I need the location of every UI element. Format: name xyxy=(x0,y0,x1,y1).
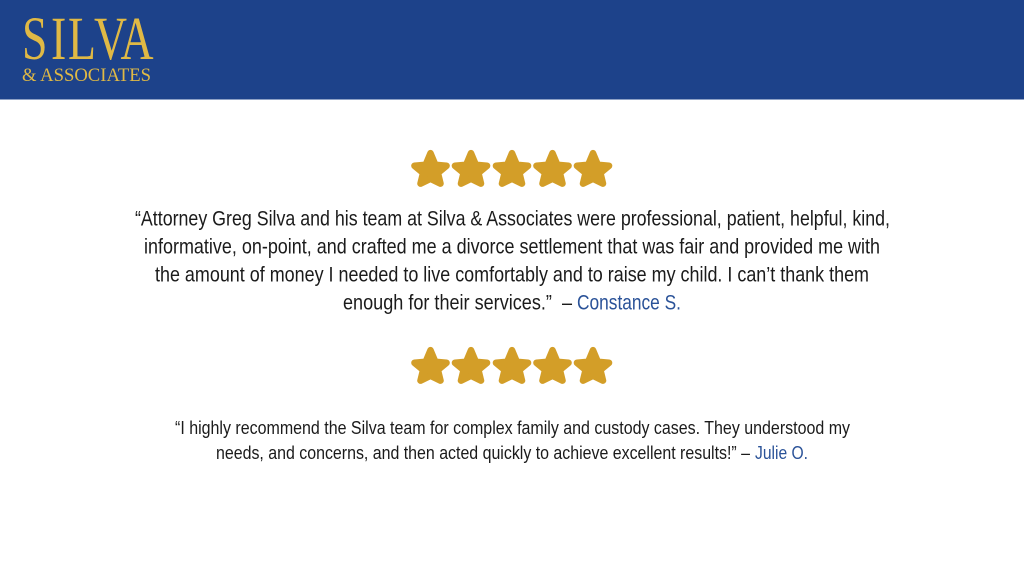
star rating: first review xyxy=(414,153,609,184)
review text: Julie O. xyxy=(175,417,851,463)
logo: & ASSOCIATES xyxy=(22,65,151,86)
review text: Constance S.: “Attorney Greg Silva and his team at Silva & Associates were professional, patient, helpful, kind, xyxy=(135,208,890,230)
review text: Constance S.: the amount of money I needed to live comfortably and to raise my child. I can’t thank them xyxy=(155,264,869,286)
review text: Constance S.: Constance S. xyxy=(577,292,681,314)
star rating: second review xyxy=(414,350,609,381)
review text: Constance S.: informative, on-point, and crafted me a divorce settlement that was fair and provided me with xyxy=(144,236,880,258)
review text: Constance S. xyxy=(135,208,890,314)
header band xyxy=(0,0,1024,100)
review text: Constance S.: enough for their services.” – xyxy=(343,292,572,314)
review text: Julie O.: needs, and concerns, and then acted quickly to achieve excellent results!” – xyxy=(216,442,751,463)
logo: SILVA xyxy=(22,5,154,73)
review text: Julie O.: “I highly recommend the Silva team for complex family and custody cases. They understood my xyxy=(175,417,851,438)
review text: Julie O.: Julie O. xyxy=(755,442,808,463)
